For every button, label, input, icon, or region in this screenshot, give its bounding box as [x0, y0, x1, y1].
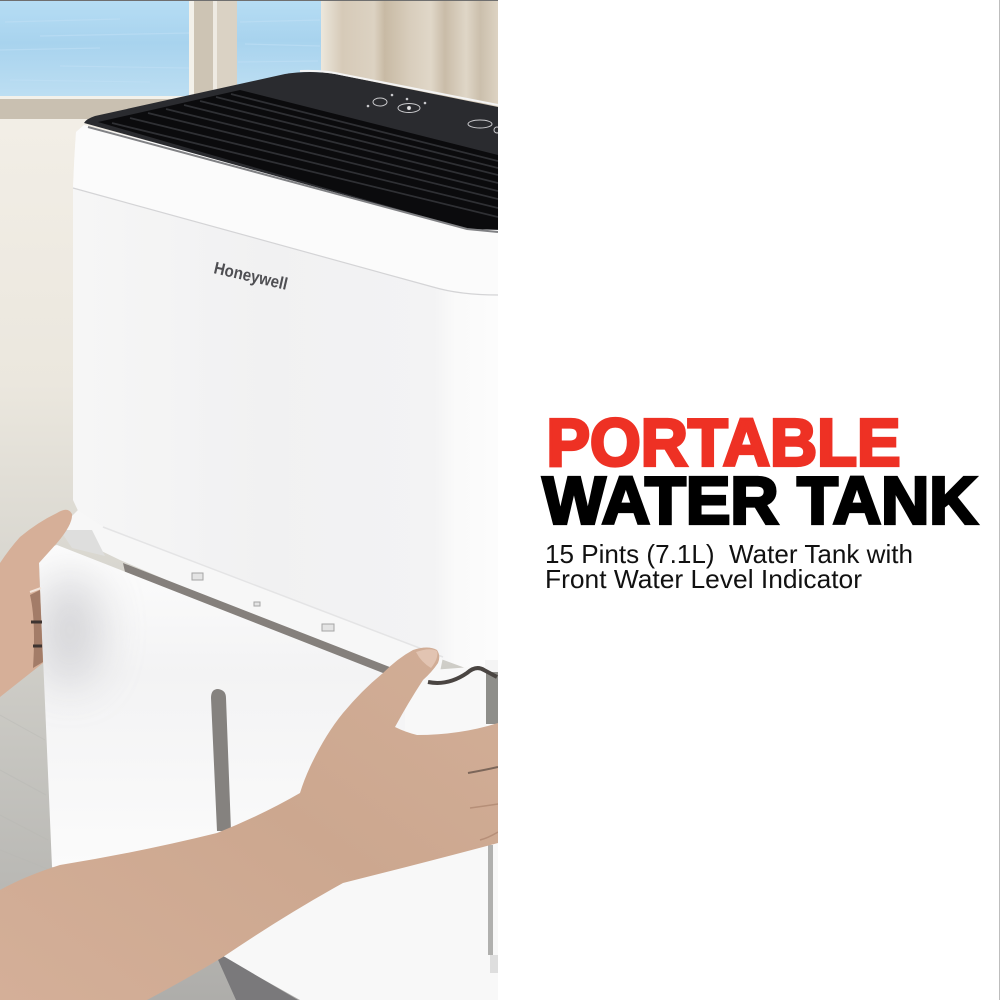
title line 1: PORTABLE	[546, 406, 900, 480]
upper front band	[73, 143, 434, 284]
floor	[0, 119, 498, 1000]
dehumidifier body	[73, 189, 498, 668]
right hand and arm	[0, 648, 498, 1000]
right side column	[428, 666, 498, 973]
description line 2: Front Water Level Indicator	[545, 564, 862, 594]
description	[545, 539, 913, 594]
dark floor shadow under unit	[218, 956, 298, 1000]
lower white section behind arm	[52, 843, 498, 1000]
window with sea view	[0, 1, 321, 119]
water level indicator	[211, 689, 231, 831]
description line 1: 15 Pints (7.1L) Water Tank with	[545, 539, 913, 569]
photo frame edge	[0, 0, 498, 1]
control buttons	[367, 94, 500, 133]
panel: product photo	[0, 0, 500, 1000]
left hand	[0, 510, 72, 697]
vent grille	[88, 90, 498, 232]
title line 2: WATER TANK	[542, 464, 978, 538]
top control panel	[84, 72, 498, 230]
lower lip of body with catch tabs	[58, 510, 443, 680]
logo: Honeywell: Honeywell	[212, 258, 289, 294]
water tank front	[39, 545, 383, 867]
title	[542, 406, 978, 538]
curtain	[321, 0, 498, 110]
right edge line	[999, 0, 1000, 1000]
